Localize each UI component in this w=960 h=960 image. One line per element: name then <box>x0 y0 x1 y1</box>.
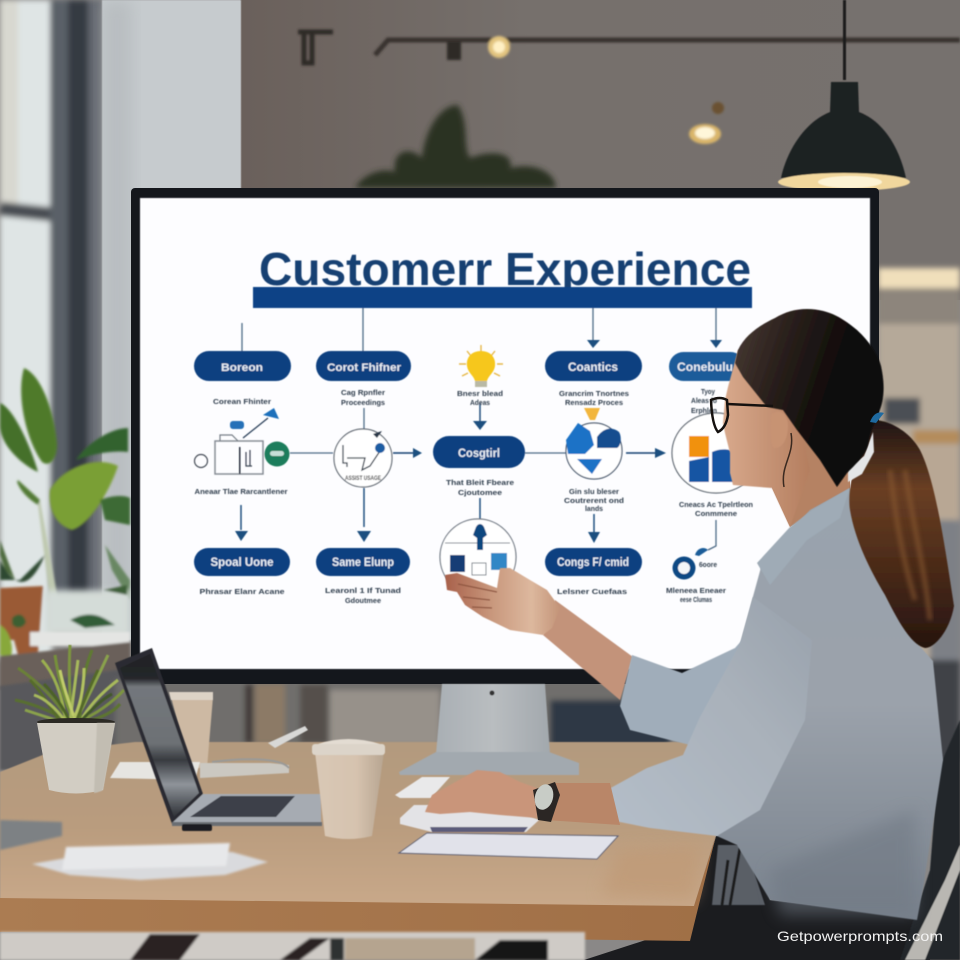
connectors <box>241 308 716 550</box>
watermark: Getpowerprompts.com <box>777 928 943 944</box>
pill: Conebulu <box>669 352 745 381</box>
chair <box>712 720 960 960</box>
watch <box>532 782 560 822</box>
captions: Mleneea Eneaer <box>666 586 726 595</box>
scrunchie <box>848 432 874 482</box>
desk objects <box>0 645 618 880</box>
back wall <box>240 0 960 300</box>
potted plant <box>15 645 124 794</box>
captions: Phrasar Elanr Acane <box>200 587 284 596</box>
shirt shading <box>770 810 915 915</box>
pill: Spoal Uone <box>194 548 290 576</box>
captions: Cjoutomee <box>458 488 502 497</box>
hair tie <box>870 412 884 423</box>
laptop <box>115 648 322 831</box>
icon: heart chart <box>566 408 622 479</box>
collar <box>757 488 850 585</box>
small notebook <box>400 805 539 832</box>
captions: Lelsner Cuefaas <box>557 587 627 596</box>
captions: 6oore <box>699 560 717 569</box>
pill: Cosgtirl <box>433 436 525 468</box>
icon: device diagram <box>194 408 290 474</box>
captions: Corean Fhinter <box>213 397 271 406</box>
diagram on screen <box>194 243 760 605</box>
hair <box>735 309 884 487</box>
icon: avatar <box>672 548 708 580</box>
near forearm <box>546 783 620 825</box>
title bar <box>253 287 752 308</box>
captions: lands <box>585 504 603 513</box>
pill: Spoal Uone: Spoal Uone <box>210 555 274 569</box>
keyboard <box>395 777 450 798</box>
icon: workflow circle: ASSIST USAGE <box>345 476 381 482</box>
captions: Coutrerent ond <box>564 496 624 505</box>
captions: eese Clumas <box>680 595 712 604</box>
pill: Boreon <box>194 351 291 381</box>
glasses <box>711 398 773 432</box>
tablet <box>0 820 62 850</box>
torso <box>717 488 943 920</box>
captions: Adeas <box>470 398 490 407</box>
desk right side shine <box>600 845 700 900</box>
captions: Gdoutmee <box>345 596 381 605</box>
captions: Cag Rpnfler <box>341 388 385 397</box>
desk <box>0 742 716 960</box>
ear <box>770 412 788 448</box>
pill: Same Elunp <box>316 548 410 576</box>
desk top <box>0 742 716 908</box>
bezel <box>131 188 879 684</box>
pill: Congs F/ cmid <box>545 548 642 576</box>
captions: Cneacs Ac Tpelrtleon <box>679 500 753 509</box>
window <box>0 0 102 660</box>
book and cable <box>110 726 308 780</box>
presenter <box>425 309 960 960</box>
title: Customerr Experience <box>259 243 751 295</box>
right wall lower <box>878 268 960 760</box>
captions: Learonl 1 If Tunad <box>325 586 401 595</box>
captions: Bnesr blead <box>457 389 503 398</box>
pale wall column <box>102 0 241 640</box>
pill: Coantics <box>545 351 642 381</box>
upper cuff sleeve <box>620 620 760 745</box>
screen <box>140 198 870 669</box>
pill: Boreon: Boreon <box>221 362 263 374</box>
captions: Tyoy <box>701 387 716 396</box>
icon: screens circle <box>440 519 516 595</box>
pill: Corot Fhifner <box>316 351 411 381</box>
captions: Proceedings <box>341 398 385 407</box>
captions: Erphlen <box>691 406 717 415</box>
back cup <box>169 692 213 768</box>
lower left wall <box>0 668 130 770</box>
pill: Corot Fhifner: Corot Fhifner <box>327 362 402 374</box>
captions: Aneaar Tlae Rarcantlener <box>194 487 288 496</box>
left plants <box>0 368 130 690</box>
pill: Coantics: Coantics <box>568 360 618 374</box>
under desk <box>0 932 585 960</box>
stacked papers <box>32 843 268 880</box>
arrowheads <box>235 340 722 543</box>
captions: Conmmene <box>695 509 737 518</box>
captions: Rensadz Proces <box>565 398 623 407</box>
track lights <box>298 32 960 144</box>
ponytail highlights <box>890 470 930 620</box>
face <box>723 345 810 527</box>
ponytail <box>849 420 954 648</box>
background plant <box>355 105 556 188</box>
captions: That Bleit Fbeare <box>446 478 514 487</box>
near arm sleeve <box>607 597 812 836</box>
captions <box>194 387 753 605</box>
monitor stand <box>399 684 579 775</box>
neck <box>770 430 850 527</box>
captions: Grancrim Tnortnes <box>559 389 629 398</box>
desk front edge <box>0 835 716 941</box>
captions: Gin slu bleser <box>569 487 619 496</box>
captions: Aleas fo <box>691 396 717 405</box>
hand <box>445 568 560 635</box>
icon: workflow circle <box>334 429 392 487</box>
monitor <box>131 188 879 684</box>
dark area right of desk <box>584 836 930 960</box>
near hand <box>425 770 537 818</box>
icon: bar chart circle <box>672 413 760 493</box>
hair wisp <box>783 433 792 487</box>
pill: Conebulu: Conebulu <box>677 360 733 374</box>
area below screen <box>115 680 670 750</box>
pill: Congs F/ cmid: Congs F/ cmid <box>557 555 629 569</box>
icon: bulb <box>459 345 503 387</box>
pill: Cosgtirl: Cosgtirl <box>458 446 500 460</box>
notepad <box>399 833 618 859</box>
pill: Same Elunp: Same Elunp <box>332 555 394 569</box>
pointing forearm <box>543 600 633 700</box>
pendant lamp <box>778 0 910 191</box>
front cup <box>312 739 385 839</box>
